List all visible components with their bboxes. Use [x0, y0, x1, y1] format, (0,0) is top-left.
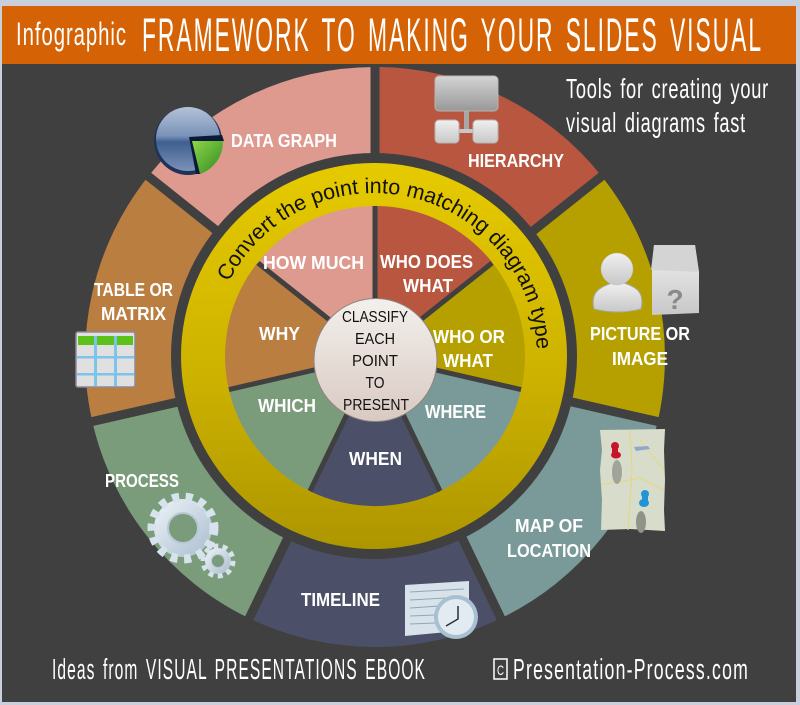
ring caption: Convert the point into matching diagram type — [218, 178, 548, 348]
icon: gears — [152, 497, 233, 576]
segment: data graph — [148, 67, 375, 357]
wedge: when — [310, 356, 440, 506]
inner labels — [258, 252, 505, 469]
title banner — [2, 6, 796, 64]
wedge: who or what — [375, 262, 525, 389]
banner tag: Infographic — [16, 16, 127, 52]
footer source: Ideas from VISUAL PRESENTATIONS EBOOK — [52, 654, 426, 686]
outer labels: PICTURE OR — [590, 324, 690, 344]
centre hub — [314, 298, 437, 422]
blue pin — [639, 490, 649, 507]
segment: map of location — [375, 357, 658, 618]
outer labels: TIMELINE — [301, 590, 380, 610]
outer labels: MAP OF — [515, 516, 583, 536]
inner labels: WHO OR — [433, 327, 505, 347]
segment: table or matrix — [85, 176, 375, 422]
hub text — [342, 309, 409, 414]
hub text: PRESENT — [343, 397, 409, 414]
outer labels: TABLE OR — [94, 280, 173, 300]
hub text: TO — [366, 375, 384, 392]
hub text: POINT — [352, 353, 398, 370]
wedge: how much — [258, 206, 375, 356]
wedge: why — [225, 262, 375, 389]
inner wheel: questions — [225, 206, 525, 506]
footer copyright: C — [497, 662, 504, 678]
icon: table — [76, 332, 135, 387]
inner labels: WHICH — [258, 396, 316, 416]
icon: hierarchy chart — [435, 76, 498, 143]
segment: process — [92, 357, 375, 618]
tools note — [566, 73, 769, 138]
wedge: which — [229, 356, 375, 491]
icon: pie chart — [154, 107, 224, 175]
icon: map with pins — [600, 429, 665, 533]
hub text: CLASSIFY — [342, 309, 408, 326]
yellow ring — [181, 163, 567, 549]
outer labels: IMAGE — [612, 349, 668, 369]
inner labels: HOW MUCH — [263, 253, 364, 273]
inner labels: WHAT — [443, 351, 493, 371]
inner labels: WHO DOES — [380, 252, 473, 272]
outer labels: LOCATION — [507, 541, 591, 561]
inner labels: WHY — [259, 324, 300, 344]
outer labels: HIERARCHY — [468, 151, 564, 171]
segment: timeline — [249, 357, 501, 647]
segment: hierarchy — [375, 67, 602, 357]
inner labels: WHEN — [349, 449, 402, 469]
outer labels: DATA GRAPH — [231, 131, 337, 151]
icon: question box: ? — [666, 284, 684, 315]
red pin — [611, 442, 621, 458]
wedge: where — [375, 356, 521, 491]
icon: person — [593, 253, 642, 312]
icon: question box — [651, 245, 699, 315]
outer labels — [94, 131, 690, 610]
hub text: EACH — [355, 331, 395, 348]
icon: schedule and clock — [405, 581, 478, 639]
wedge: who does what — [375, 206, 492, 356]
inner labels: WHAT — [403, 276, 453, 296]
inner labels: WHERE — [425, 402, 486, 422]
outer labels: PROCESS — [105, 471, 179, 491]
outer labels: MATRIX — [101, 304, 166, 324]
dark gap circle — [171, 153, 577, 559]
segment: picture or image — [375, 176, 665, 422]
outer wheel: diagram types — [82, 65, 668, 647]
